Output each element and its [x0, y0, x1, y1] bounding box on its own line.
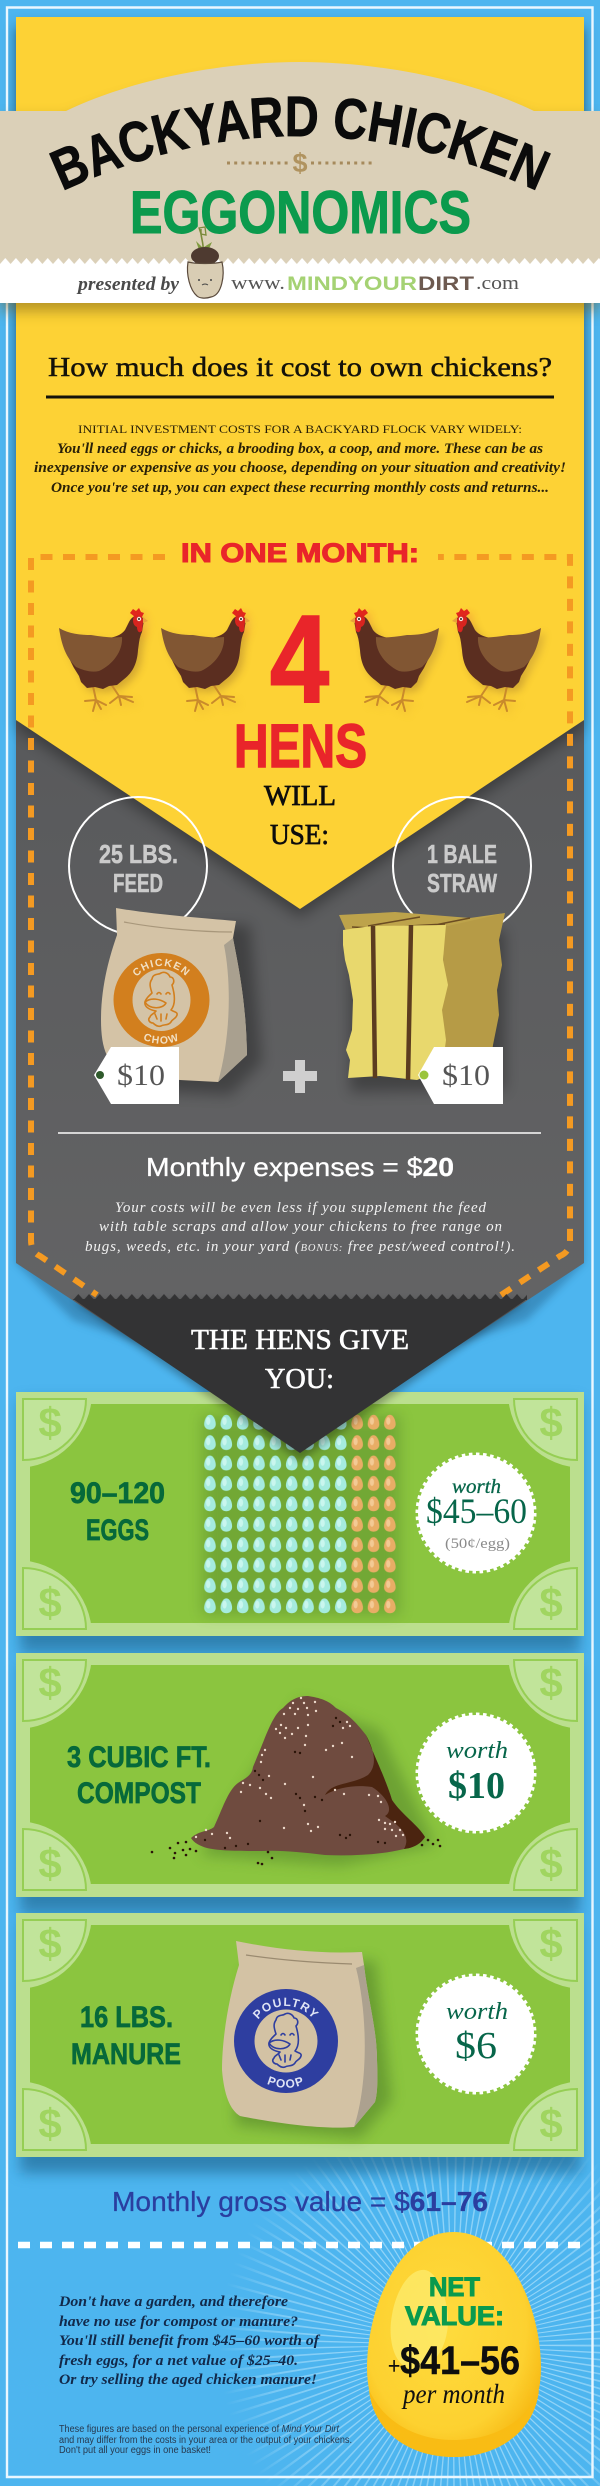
value badge: worth — [446, 1999, 508, 2025]
dollar signs: $ — [539, 1920, 563, 1967]
value badge: worth — [446, 1738, 508, 1764]
label — [67, 1741, 211, 1810]
intro text: You'll need eggs or chicks, a brooding box, a coop, and more. These can be as — [57, 441, 543, 457]
bill: compost — [16, 1653, 584, 1913]
value badge: $45–60 — [426, 1491, 527, 1531]
number of hens: 4 — [270, 591, 329, 729]
expenses note: Your costs will be even less if you supplement the feed — [115, 1200, 487, 1216]
hen 1 — [59, 608, 148, 711]
monthly gross value: Monthly gross value = $61–76 — [112, 2186, 488, 2217]
advice text: Don't have a garden, and therefore — [58, 2294, 288, 2310]
icon: chicken chow feed bag: CHICKEN — [133, 958, 190, 976]
value badge: $6 — [455, 2025, 497, 2067]
dollar signs: $ — [38, 1579, 62, 1626]
label — [71, 2001, 181, 2071]
title banner — [0, 62, 600, 320]
label: EGGS — [86, 1514, 149, 1547]
value badge: $10 — [448, 1765, 505, 1807]
icon: poultry poop bag: POOP — [267, 2076, 302, 2088]
number of hens — [234, 591, 367, 780]
dollar signs: $ — [539, 1399, 563, 1446]
website url — [231, 273, 519, 295]
title banner: BACKYARD CHICKEN — [49, 96, 551, 190]
hen 4 — [452, 608, 541, 711]
golden egg: net value — [367, 2232, 541, 2457]
price tag: straw — [418, 1047, 503, 1104]
dark ribbon: the hens give you: YOU: — [265, 1364, 334, 1395]
label: 16 LBS. — [80, 2001, 173, 2034]
fine print: and may differ from the costs in your area or the output of your chickens. — [59, 2435, 352, 2446]
subtitle: EGGONOMICS — [130, 179, 471, 246]
icon: plus sign — [283, 1060, 317, 1093]
value badge: (50¢/egg) — [445, 1536, 510, 1552]
will use text — [264, 781, 336, 851]
icon: compost pile — [151, 1696, 441, 1866]
expenses note: with table scraps and allow your chickens to free range on — [99, 1219, 502, 1235]
dollar signs: $ — [38, 1659, 62, 1706]
label: 90–120 — [70, 1477, 165, 1510]
intro text: INITIAL INVESTMENT COSTS FOR A BACKYARD FLOCK VARY WIDELY: — [78, 422, 522, 436]
label: COMPOST — [77, 1777, 201, 1810]
hen 3 — [350, 608, 439, 711]
dollar divider: $ — [292, 148, 308, 178]
advice text: fresh eggs, for a net value of $25–40. — [59, 2353, 298, 2369]
fine print: These figures are based on the personal experience of Mind Your Dirt — [59, 2424, 340, 2435]
hens — [59, 608, 545, 715]
advice text: You'll still benefit from $45–60 worth of — [59, 2333, 321, 2349]
per month: per month — [401, 2379, 505, 2409]
sunburst rays — [328, 2220, 578, 2470]
dashed divider — [18, 2242, 582, 2248]
dollar signs — [38, 1920, 563, 2147]
icon: chicken chow feed bag: CHOW — [144, 1034, 178, 1044]
intro text — [34, 422, 566, 496]
value badge — [418, 1976, 534, 2092]
egg grid — [202, 1412, 400, 1616]
question heading: How much does it cost to own chickens? — [48, 352, 552, 382]
dollar signs: $ — [38, 1399, 62, 1446]
website url: DIRT — [418, 274, 474, 295]
dollar signs — [38, 1659, 563, 1887]
divider — [58, 1132, 541, 1134]
title arc text — [44, 136, 556, 200]
net value label: VALUE: — [405, 2301, 504, 2331]
fine print: Don't put all your eggs in one basket! — [59, 2445, 211, 2456]
icon: chicken chow feed bag — [101, 908, 265, 1098]
dollar signs: $ — [539, 1579, 563, 1626]
will use text: USE: — [270, 820, 329, 851]
net value amount: +$41–56 — [388, 2339, 520, 2383]
hen shadows — [63, 612, 545, 715]
value badge — [418, 1715, 534, 1831]
price tag: feed — [94, 1047, 179, 1104]
hen 2 — [161, 608, 250, 711]
website url: www. — [231, 273, 285, 294]
dollar signs: $ — [38, 1840, 62, 1887]
intro text: inexpensive or expensive as you choose, depending on your situation and creativity! — [34, 460, 566, 476]
expenses note — [85, 1200, 515, 1255]
advice text — [58, 2294, 321, 2388]
price tag: feed: $10 — [117, 1059, 165, 1092]
dark ribbon: the hens give you — [73, 1294, 527, 1461]
price tag: straw: $10 — [442, 1059, 490, 1092]
circle: feed quantity — [69, 797, 207, 935]
dashed stitching border — [31, 557, 570, 1295]
expenses note: bugs, weeds, etc. in your yard (BONUS: free pest/weed control!). — [85, 1239, 515, 1255]
circle: straw quantity — [393, 797, 531, 935]
net value label: NET — [429, 2272, 480, 2302]
heading: in one month: IN ONE MONTH: — [181, 538, 419, 568]
panel: yellow intro and hens — [16, 17, 584, 1450]
label — [70, 1477, 165, 1547]
advice text: have no use for compost or manure? — [59, 2314, 298, 2330]
circle: straw quantity: 1 BALE — [427, 839, 497, 869]
value badge — [418, 1455, 534, 1571]
advice text: Or try selling the aged chicken manure! — [59, 2372, 317, 2388]
net value label — [405, 2272, 504, 2331]
icon: poultry poop bag: POULTRY — [252, 1998, 319, 2019]
icon: sprouting pot character — [187, 227, 223, 298]
intro text: Once you're set up, you can expect these recurring monthly costs and returns... — [51, 480, 549, 496]
dollar signs: $ — [38, 2100, 62, 2147]
question heading — [46, 352, 554, 398]
fine print — [59, 2424, 352, 2456]
circle: feed quantity: FEED — [113, 868, 163, 898]
circle: feed quantity: 25 LBS. — [99, 839, 178, 869]
dark ribbon: the hens give you: THE HENS GIVE — [191, 1325, 409, 1356]
will use text: WILL — [264, 781, 336, 812]
dollar signs: $ — [38, 1920, 62, 1967]
dollar signs — [38, 1399, 563, 1626]
label: 3 CUBIC FT. — [67, 1741, 211, 1774]
bill: eggs — [16, 1392, 584, 1652]
label: MANURE — [71, 2038, 181, 2071]
dollar signs: $ — [539, 1840, 563, 1887]
presented by: presented by — [76, 274, 180, 295]
monthly expenses total: Monthly expenses = $ 20 — [146, 1152, 454, 1182]
website url: MINDYOUR — [287, 274, 417, 295]
circle: straw quantity: STRAW — [427, 868, 497, 898]
number of hens: HENS — [234, 712, 367, 780]
dollar signs: $ — [539, 2100, 563, 2147]
icon: straw bale — [339, 912, 505, 1092]
value badge: worth — [452, 1476, 501, 1498]
dollar signs: $ — [539, 1659, 563, 1706]
bill: manure — [13, 1913, 587, 2181]
icon: poultry poop bag — [222, 1941, 396, 2142]
website url: .com — [476, 273, 519, 294]
